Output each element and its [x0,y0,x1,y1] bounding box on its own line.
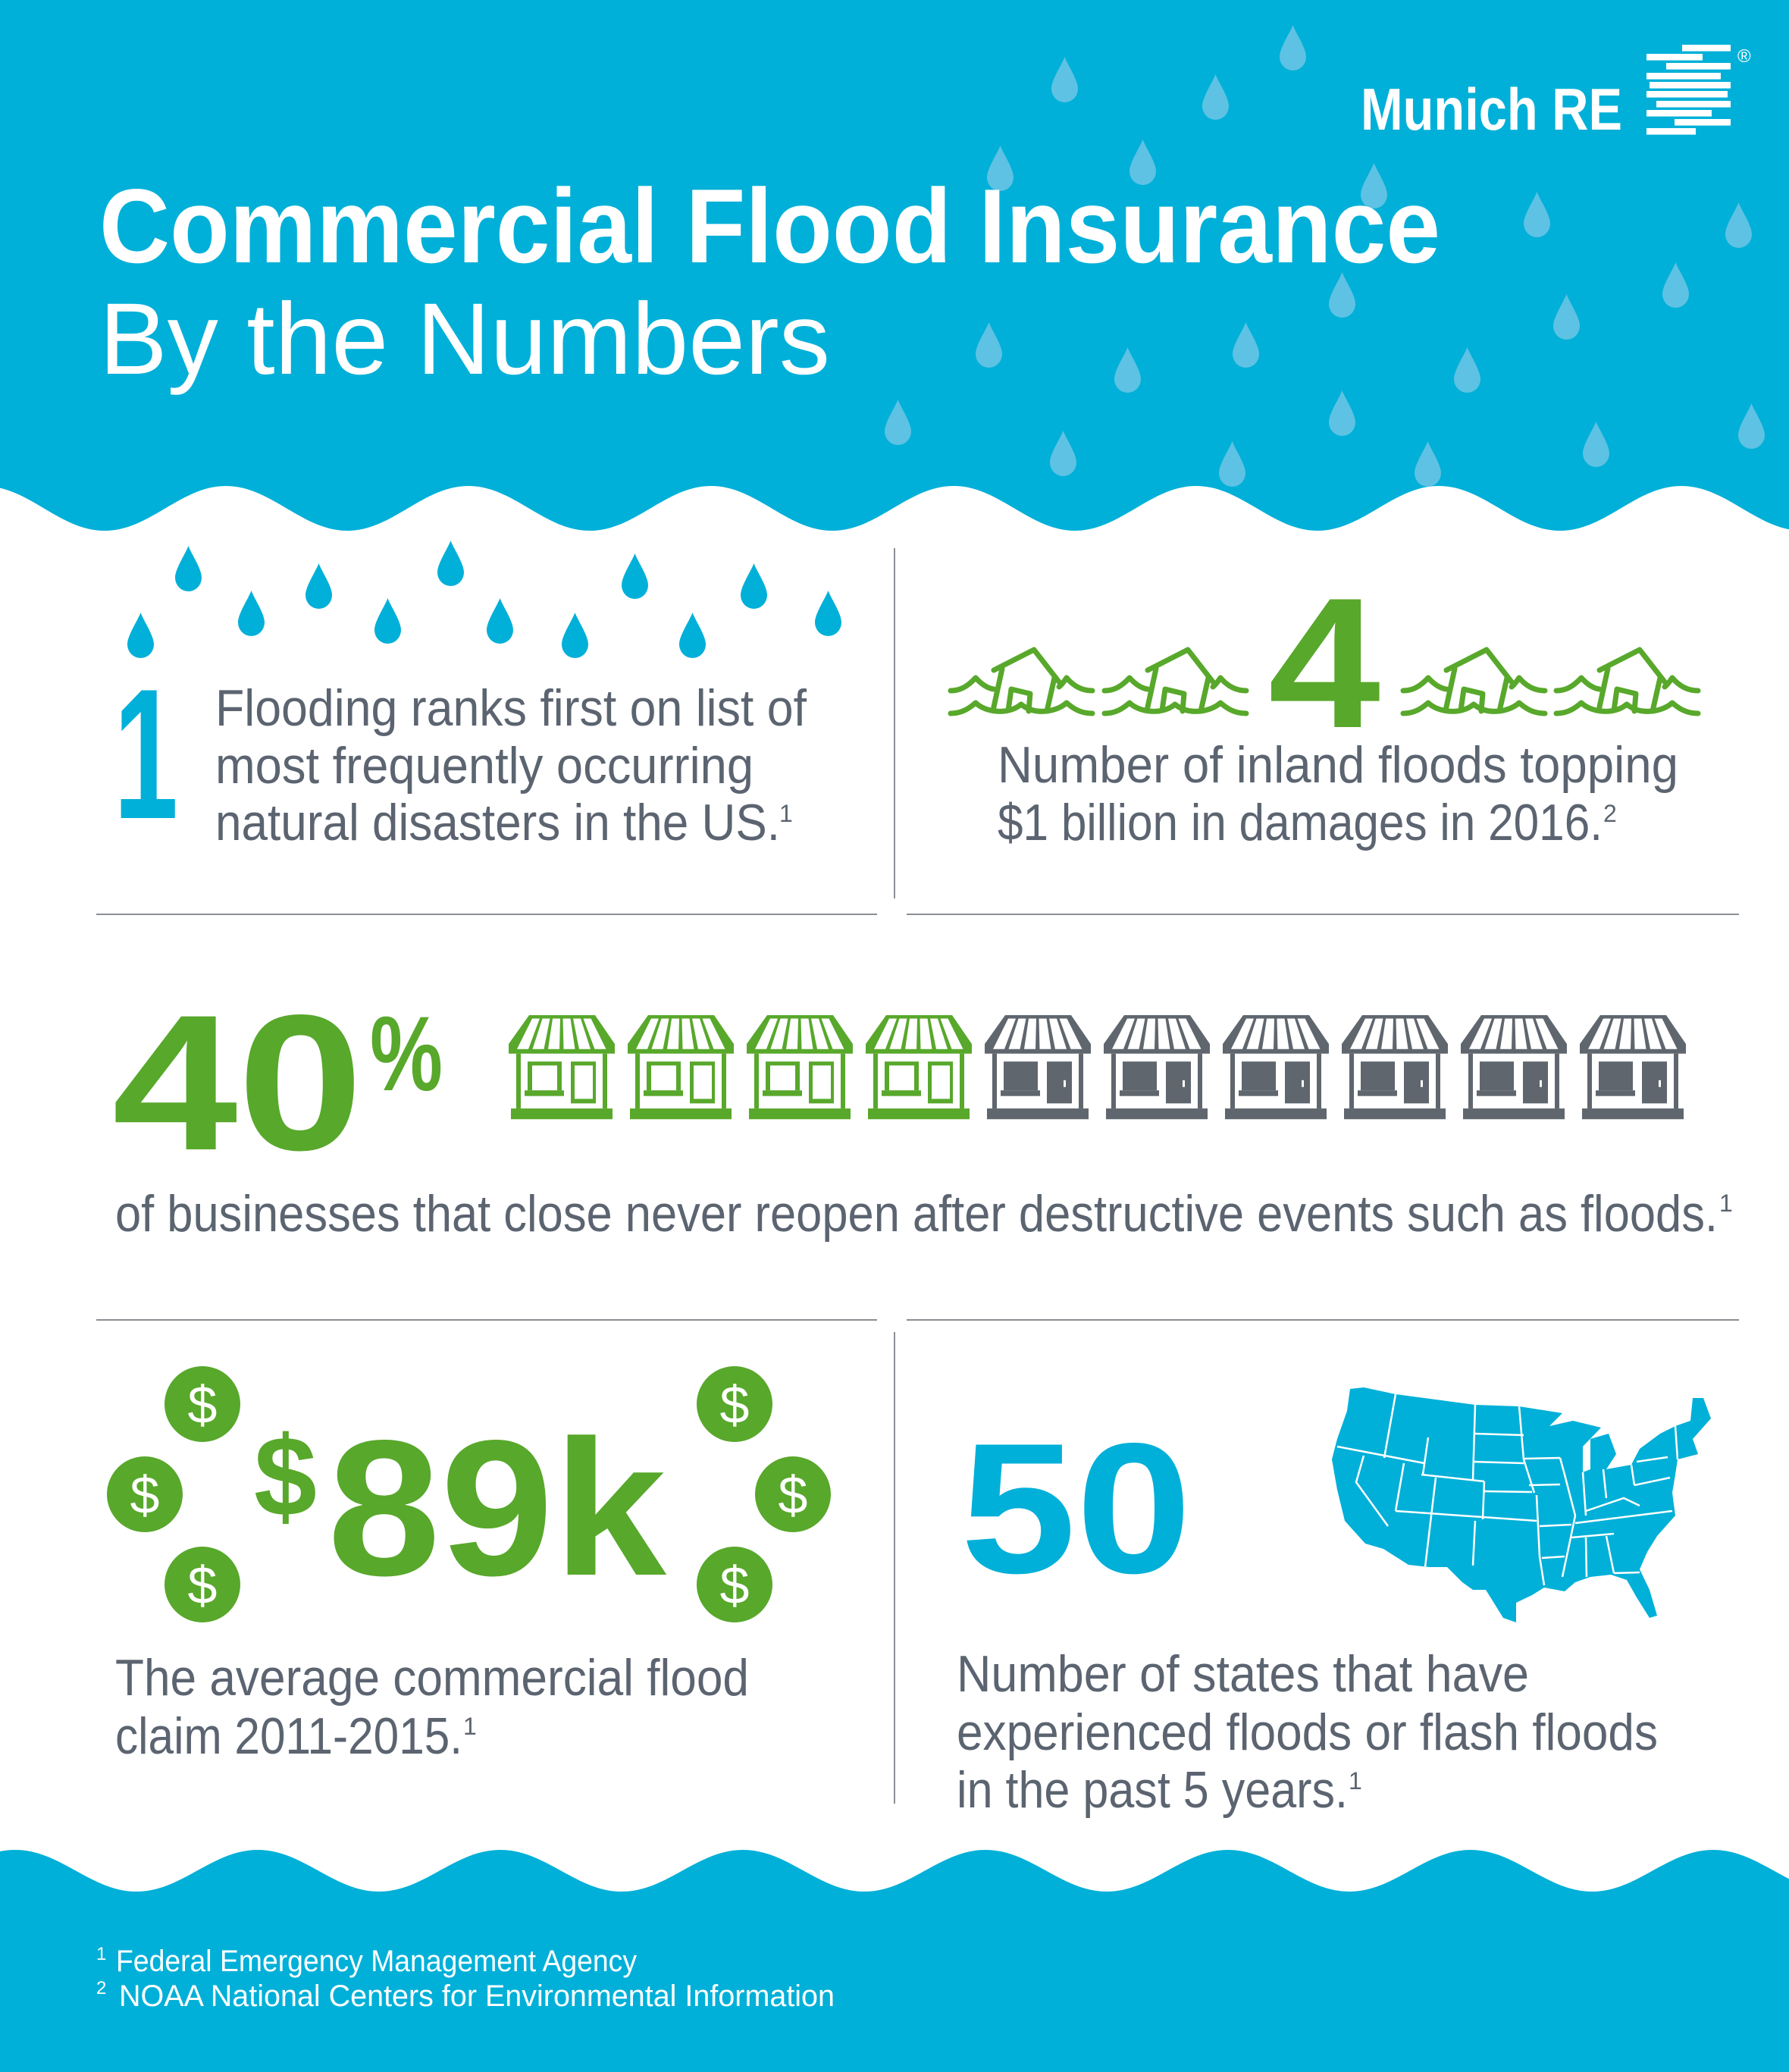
text block: Flooding ranks first on list of [215,679,807,737]
text block: $1 billion in damages in 2016. [998,794,1603,851]
icon: flooded houses [951,650,1698,713]
panel: 40% businesses [112,975,1733,1243]
text block: most frequently occurring [215,737,754,795]
text block: 1 [779,800,793,827]
big number $89k: $ [254,1412,317,1540]
big number 50: 50 [960,1404,1192,1612]
big number 40% [112,975,443,1191]
logo: Munich RE [1361,45,1751,143]
footnotes [96,1944,835,2013]
text block: 2 [1603,800,1617,827]
dividers [96,548,1739,1804]
icon: dollar coins: $ [779,1465,807,1525]
text block: in the past 5 years. [957,1761,1348,1819]
title [99,168,1440,396]
big number 1: 1 [114,650,178,857]
big number 4: 4 [1268,559,1380,766]
header rain drops [885,25,1765,487]
big number 40%: % [370,994,443,1113]
text block [998,736,1678,851]
big number $89k: 89k [327,1400,667,1616]
title: Commercial Flood Insurance [99,168,1440,285]
icon: dollar coins: $ [188,1556,217,1615]
footnotes: 2 [96,1978,106,1998]
header background [0,0,1789,576]
text block: experienced floods or flash floods [957,1704,1658,1761]
text block: 1 [1349,1767,1362,1795]
panel: flooding ranks first [114,541,841,857]
panel: 50 states [957,1387,1711,1819]
text block: Number of states that have [957,1645,1529,1703]
text block: Number of inland floods topping [998,736,1678,794]
icon: dollar coins: $ [130,1465,159,1525]
panel: inland floods [951,559,1698,851]
icon: dollar coins: $ [720,1375,749,1434]
icon: dollar coins: $ [720,1556,749,1615]
text block: The average commercial flood [115,1649,749,1707]
text block: 1 [463,1713,477,1740]
footnotes: NOAA National Centers for Environmental Information [119,1980,835,2013]
panel: average claim [107,1366,831,1765]
text block: claim 2011-2015. [115,1707,462,1765]
logo: Munich RE: ® [1737,46,1751,67]
icon: dollar coins: $ [188,1375,217,1434]
footnotes: 1 [96,1944,106,1964]
icon: dollar coins [107,1366,831,1622]
footer background [0,1850,1789,2072]
footnotes: Federal Emergency Management Agency [116,1945,637,1978]
icon: storefronts [509,1015,1686,1119]
icon: US map [1332,1387,1711,1622]
text block: 1 [1719,1190,1733,1217]
text block [115,1649,749,1765]
big number 40%: 40 [112,975,363,1191]
icon: rain drops [127,541,841,658]
logo: Munich RE: Munich RE [1361,76,1622,143]
text block [215,679,807,851]
title: By the Numbers [99,283,830,396]
text block: natural disasters in the US. [215,794,780,851]
text block [957,1645,1658,1819]
